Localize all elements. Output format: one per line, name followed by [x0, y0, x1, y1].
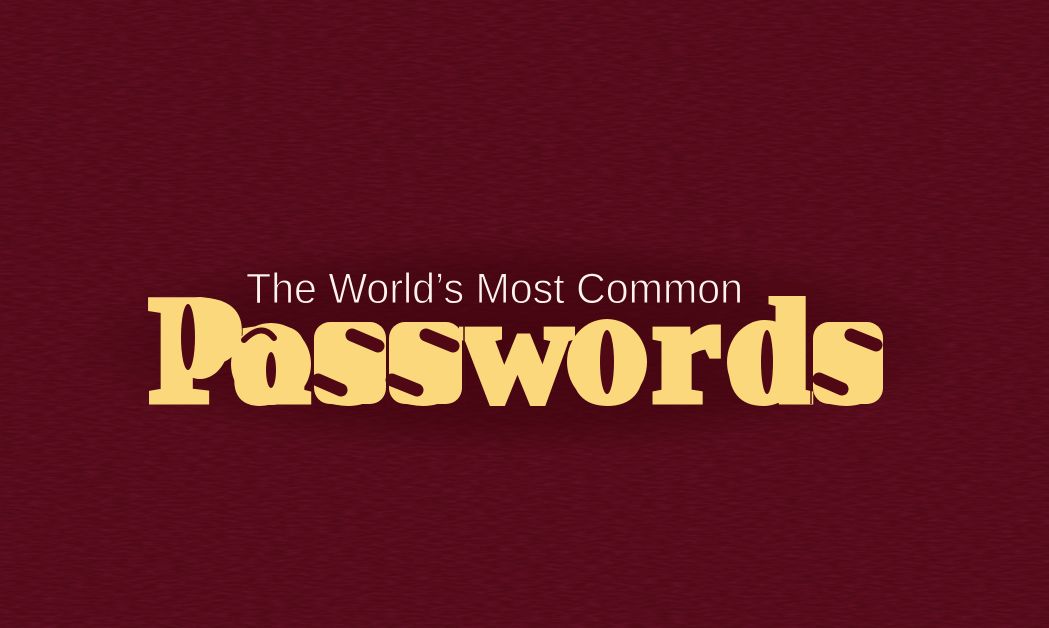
- heavy weight fill behind the letter slits: [170, 297, 883, 405]
- main title: Passwords: [150, 267, 877, 433]
- subtitle: The World’s Most Common: [246, 265, 743, 313]
- letter slits and gaps: [181, 284, 876, 404]
